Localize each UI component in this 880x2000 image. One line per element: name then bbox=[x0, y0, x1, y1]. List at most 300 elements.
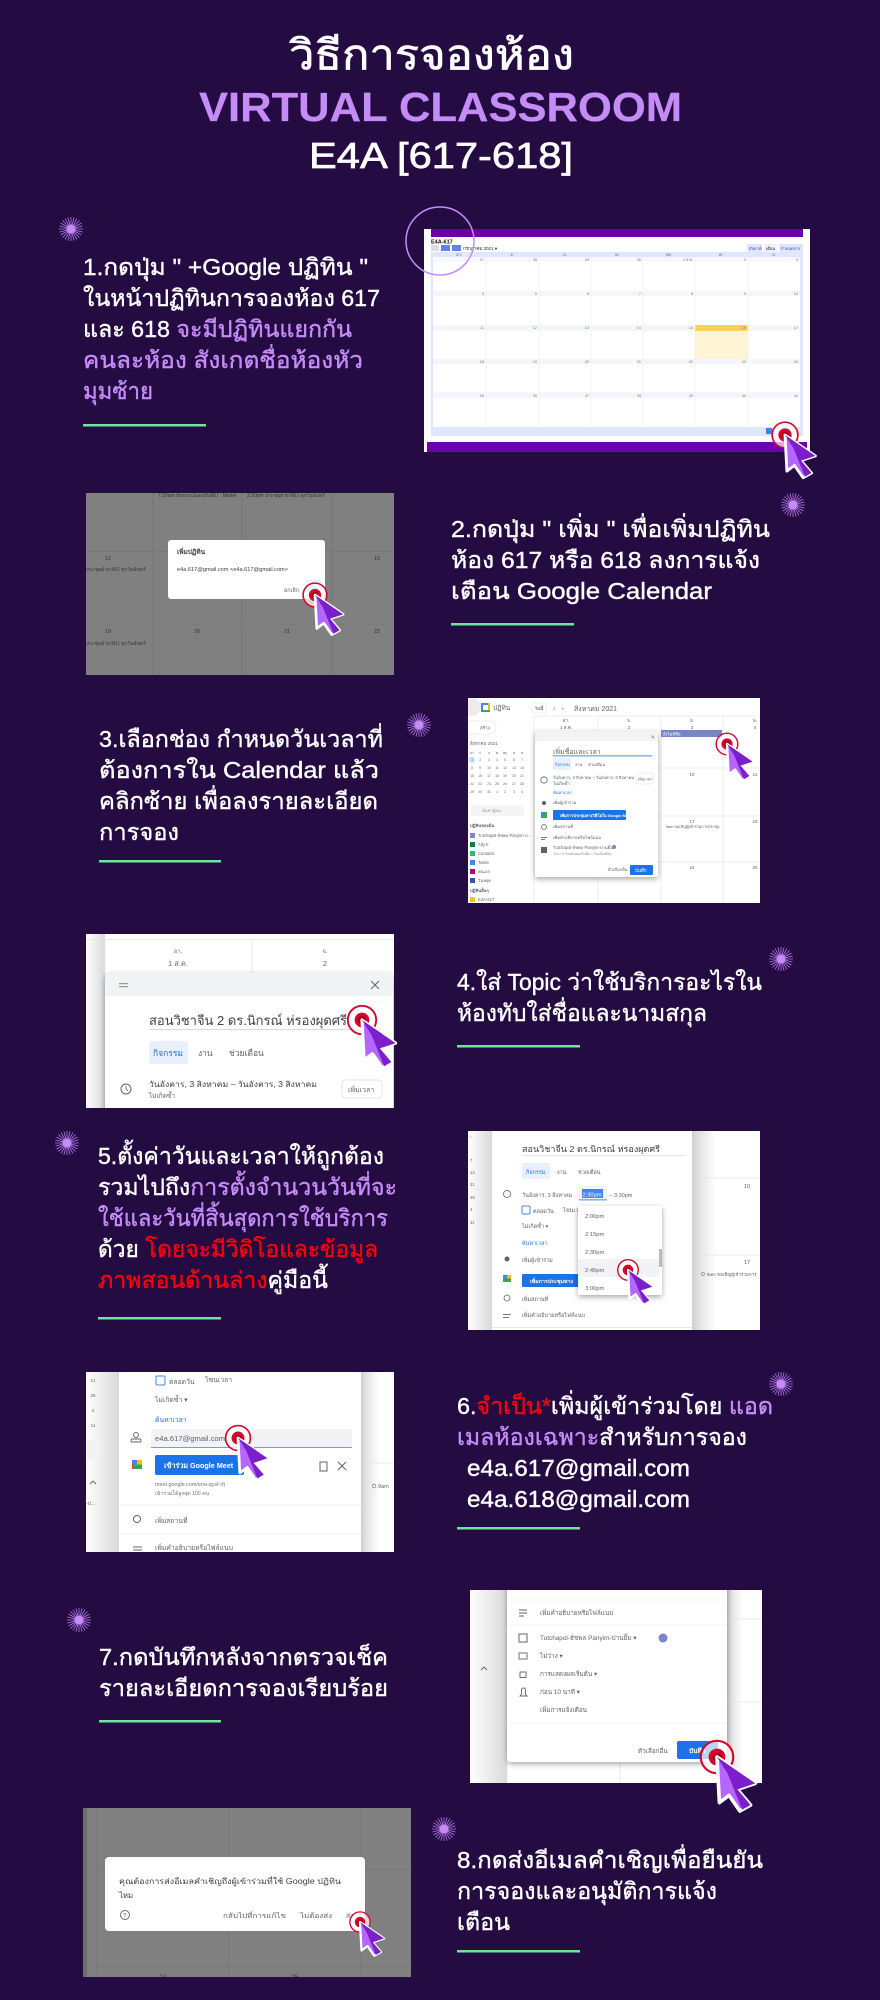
screenshot: time dropdown: 21 bbox=[470, 1182, 475, 1187]
icon: click cursor bbox=[350, 1912, 384, 1956]
screenshot: new event dialog over calendar bbox=[468, 698, 760, 903]
screenshot: new event dialog over calendar: งาน bbox=[575, 762, 582, 767]
screenshot: event title entry: งาน bbox=[198, 1048, 213, 1058]
screenshot: save event: เพิ่มคำอธิบายหรือไฟล์แนบ bbox=[540, 1608, 613, 1617]
screenshot: calendar month view: 29 bbox=[585, 258, 589, 262]
screenshot: calendar month view: 29 bbox=[689, 394, 693, 398]
icon: sparkle bbox=[769, 1372, 793, 1396]
screenshot: new event dialog over calendar: 23 bbox=[478, 782, 482, 786]
screenshot: calendar month view: 22 bbox=[689, 360, 693, 364]
screenshot: new event dialog over calendar: 24 bbox=[487, 782, 491, 786]
screenshot: new event dialog over calendar: 24 bbox=[689, 865, 695, 870]
screenshot: new event dialog over calendar: 28 bbox=[520, 782, 524, 786]
screenshot: new event dialog over calendar: 14 bbox=[520, 766, 524, 770]
screenshot: time dropdown: – bbox=[609, 1193, 613, 1199]
screenshot: new event dialog over calendar: 1 bbox=[471, 758, 473, 762]
screenshot: new event dialog over calendar: อ bbox=[488, 751, 490, 755]
screenshot: calendar month view: 3 bbox=[796, 258, 798, 262]
screenshot: new event dialog over calendar: Contacts bbox=[478, 851, 495, 856]
step 3 text: การจอง bbox=[99, 819, 179, 845]
step 8 text: การจองและอนุมัติการแจ้ง bbox=[457, 1878, 717, 1905]
screenshot: add guest field: 9am bbox=[378, 1484, 389, 1490]
screenshot: calendar month view: 21 bbox=[637, 360, 641, 364]
panel: step 6 bbox=[86, 1372, 793, 1552]
step 2 text bbox=[451, 513, 770, 604]
screenshot: new event dialog over calendar: 25 bbox=[495, 782, 499, 786]
step 1 text: คนละห้อง สังเกตชื่อห้องหัว bbox=[83, 344, 363, 373]
icon: sparkle bbox=[781, 493, 805, 517]
screenshot: calendar month view: 6 bbox=[587, 292, 589, 296]
screenshot: event title entry: ช่วยเตือน bbox=[229, 1048, 264, 1058]
step 5 text: รวมไปถึงการตั้งจำนวนวันที่จะ bbox=[98, 1171, 397, 1200]
icon: sparkle bbox=[769, 947, 793, 971]
screenshot: new event dialog over calendar: × bbox=[651, 735, 655, 741]
screenshot: new event dialog over calendar: ส bbox=[521, 751, 523, 755]
screenshot: time dropdown: 2:15pm bbox=[585, 1232, 605, 1238]
icon: click cursor bbox=[226, 1426, 267, 1479]
screenshot: new event dialog over calendar: 4 bbox=[521, 790, 523, 794]
icon: sparkle bbox=[432, 1817, 456, 1841]
screenshot: time dropdown: 4 bbox=[470, 1207, 473, 1212]
screenshot: new event dialog over calendar: Tasks bbox=[478, 860, 489, 865]
step 1 text: มุมซ้าย bbox=[83, 378, 153, 405]
panel: step 5 bbox=[55, 1131, 760, 1330]
screenshot: add guest field: ตลอดวัน bbox=[169, 1378, 195, 1386]
title: VIRTUAL CLASSROOM bbox=[199, 84, 682, 130]
screenshot: new event dialog over calendar: จ. bbox=[627, 718, 631, 723]
screenshot: time dropdown: 2:30pm bbox=[582, 1192, 602, 1198]
screenshot: add guest field: meet.google.com/ena-qysf-rfj bbox=[155, 1482, 225, 1488]
icon: sparkle bbox=[407, 713, 431, 737]
screenshot: time dropdown: 9am ขอเชิญผู้เข้าร่วมการ bbox=[707, 1272, 757, 1278]
screenshot: calendar month view: 12 bbox=[533, 326, 537, 330]
screenshot: calendar month view: E4A-617 bbox=[431, 240, 453, 246]
screenshot: calendar month view: 18 bbox=[480, 360, 484, 364]
screenshot: new event dialog over calendar: ตัวเลือกอื่น bbox=[608, 866, 628, 872]
screenshot: new event dialog over calendar: 21 bbox=[520, 774, 524, 778]
screenshot: add guest field: e4a.617@gmail.com bbox=[155, 1434, 225, 1443]
screenshot: calendar month view: พฤ. bbox=[666, 252, 672, 257]
screenshot: time dropdown: 2:30pm bbox=[585, 1250, 605, 1256]
screenshot: calendar month view: สัปดาห์ bbox=[749, 246, 762, 251]
screenshot: send invitation dialog: 25 bbox=[292, 1975, 299, 1981]
screenshot: new event dialog over calendar: ปฏิทินอื่นๆ bbox=[470, 887, 489, 894]
screenshot: add guest field: -ป... bbox=[86, 1501, 95, 1507]
screenshot: new event dialog over calendar: 9 bbox=[479, 766, 481, 770]
screenshot: add guest field bbox=[86, 1372, 394, 1552]
screenshot: calendar month view: 16 bbox=[742, 326, 746, 330]
screenshot: time dropdown: 11 bbox=[470, 1220, 475, 1225]
screenshot: time dropdown: 2:45pm bbox=[585, 1268, 605, 1274]
screenshot: new event dialog over calendar: สร้าง bbox=[480, 726, 490, 730]
screenshot: calendar month view: 27 bbox=[480, 258, 484, 262]
screenshot: new event dialog over calendar: ค้นหาผู้คน bbox=[482, 808, 501, 814]
screenshot: time dropdown: เพิ่มผู้เข้าร่วม bbox=[522, 1256, 553, 1264]
panel: step 2 bbox=[86, 492, 805, 675]
screenshot: calendar month view: 24 bbox=[794, 360, 798, 364]
screenshot: add calendar dialog: ประชุมฝ่าย MLI ทุกวันจันทร์ bbox=[86, 640, 146, 647]
icon: click cursor bbox=[618, 1260, 652, 1304]
screenshot: new event dialog over calendar: วันนี้ bbox=[534, 705, 544, 711]
screenshot: send invitation dialog: 24 bbox=[160, 1975, 167, 1981]
screenshot: add calendar dialog: ยกเลิก bbox=[284, 587, 299, 594]
screenshot: new event dialog over calendar: 18 bbox=[752, 819, 758, 824]
step 5 text: ใช้และวันที่สิ้นสุดการใช้บริการ bbox=[98, 1202, 388, 1232]
panel: step 8 bbox=[83, 1808, 763, 1981]
screenshot: new event dialog over calendar: 30 bbox=[478, 790, 482, 794]
screenshot: calendar month view: 7 bbox=[639, 292, 641, 296]
screenshot: new event dialog over calendar: 19 bbox=[503, 774, 507, 778]
screenshot: time dropdown: วันอังคาร, 3 สิงหาคม bbox=[522, 1192, 573, 1199]
screenshot: new event dialog over calendar: 8 bbox=[471, 766, 473, 770]
screenshot: new event dialog over calendar: 10 bbox=[689, 772, 695, 777]
step 6 text: 6.จำเป็น*เพิ่มผู้เข้าร่วมโดย แอด bbox=[457, 1390, 773, 1420]
screenshot: time dropdown: เพิ่มการประชุมทาง bbox=[530, 1277, 573, 1285]
screenshot: new event dialog over calendar: 1 ส.ค. bbox=[560, 725, 572, 730]
screenshot: add guest field: เข้าร่วม Google Meet bbox=[164, 1461, 234, 1470]
screenshot: time dropdown: 17 bbox=[744, 1260, 750, 1266]
screenshot: time dropdown: เพิ่มสถานที่ bbox=[522, 1295, 549, 1303]
step 8 text bbox=[457, 1844, 763, 1935]
screenshot: new event dialog over calendar: เพิ่มชื่อและเวลา bbox=[553, 747, 601, 756]
screenshot: time dropdown: ช่วยเตือน bbox=[578, 1169, 601, 1176]
screenshot: time dropdown: 10 bbox=[744, 1184, 750, 1190]
screenshot: new event dialog over calendar: 7 bbox=[521, 758, 523, 762]
screenshot: new event dialog over calendar: ไม่เกิดซ้ำ bbox=[552, 780, 570, 786]
screenshot: new event dialog over calendar: พฤ bbox=[503, 751, 507, 755]
step 5 text: ภาพสอนด้านล่างคู่มือนี้ bbox=[98, 1264, 328, 1294]
screenshot: calendar month view: 1 ส.ค. bbox=[683, 257, 693, 262]
screenshot: event title entry bbox=[86, 934, 394, 1108]
screenshot: send invitation dialog: ไหม bbox=[118, 1891, 133, 1900]
screenshot: add guest field: ไม่เกิดซ้ำ ▾ bbox=[154, 1394, 188, 1404]
screenshot: calendar month view bbox=[424, 229, 810, 452]
screenshot: add calendar dialog: เพิ่มปฏิทิน bbox=[177, 546, 206, 556]
screenshot: add calendar dialog: 21 bbox=[284, 629, 290, 635]
icon: sparkle bbox=[67, 1608, 91, 1632]
screenshot: calendar month view: 27 bbox=[585, 394, 589, 398]
screenshot: calendar month view: 9 bbox=[744, 292, 746, 296]
screenshot: calendar month view: 30 bbox=[742, 394, 746, 398]
step 2 text: ห้อง 617 หรือ 618 ลงการแจ้ง bbox=[451, 547, 760, 573]
screenshot: event title entry: ไม่เกิดซ้ำ bbox=[148, 1091, 175, 1100]
title: E4A [617-618] bbox=[309, 135, 573, 176]
screenshot: new event dialog over calendar: 12 bbox=[503, 766, 507, 770]
screenshot: save event: การแสดงผลเริ่มต้น ▾ bbox=[540, 1669, 597, 1678]
screenshot: calendar month view: 11 bbox=[480, 326, 484, 330]
screenshot: calendar month view: 15 bbox=[689, 326, 693, 330]
step 8 text: 8.กดส่งอีเมลคำเชิญเพื่อยืนยัน bbox=[457, 1844, 763, 1873]
screenshot: new event dialog over calendar: 2 bbox=[628, 725, 631, 730]
screenshot: new event dialog over calendar: ปฏิทิน bbox=[493, 704, 511, 712]
screenshot: new event dialog over calendar: ว่าง • การแสดงผลเริ่มต้น • ไม่แจ้งเตือน bbox=[553, 851, 612, 856]
screenshot: event title entry: อา. bbox=[174, 949, 183, 955]
screenshot: time dropdown: ค้นหาเวลา bbox=[522, 1240, 548, 1247]
step 1 text: 1.กดปุ่ม " +Google ปฏิทิน " bbox=[83, 254, 368, 281]
icon: click cursor bbox=[701, 1741, 755, 1811]
screenshot: new event dialog over calendar: 27 bbox=[512, 782, 516, 786]
screenshot: send invitation dialog: ไม่ต้องส่ง bbox=[299, 1912, 332, 1920]
screenshot: calendar month view: 4 bbox=[482, 292, 484, 296]
step 4 text: 4.ใส่ Topic ว่าใช้บริการอะไรใน bbox=[457, 969, 762, 995]
screenshot: send invitation dialog: ? bbox=[123, 1914, 127, 1920]
screenshot: send invitation dialog: คุณต้องการส่งอีเมลคำเชิญถึงผู้เข้าร่วมที่ใช้ Google ปฏิทิน bbox=[119, 1876, 342, 1887]
screenshot: new event dialog over calendar: เพิ่มสถานที่ bbox=[553, 823, 573, 829]
screenshot: time dropdown bbox=[468, 1131, 760, 1330]
screenshot: new event dialog over calendar: 18 bbox=[495, 774, 499, 778]
screenshot: add guest field: 4 bbox=[92, 1408, 95, 1413]
screenshot: new event dialog over calendar: พ bbox=[496, 751, 498, 755]
screenshot: calendar month view: ส. bbox=[772, 252, 776, 257]
screenshot: new event dialog over calendar: 11 bbox=[753, 772, 758, 777]
screenshot: add calendar dialog: 2:30pm ประชุมฝ่าย MLI ทุกวันจันทร์ bbox=[247, 492, 325, 499]
step 6 text: เมลห้องเฉพาะสำหรับการจอง bbox=[457, 1424, 747, 1450]
screenshot: event title entry: เพิ่มเวลา bbox=[348, 1085, 374, 1094]
step 3 text: 3.เลือกช่อง กำหนดวันเวลาที่ bbox=[99, 723, 383, 752]
screenshot: new event dialog over calendar: 9am ขอเชิญผู้เข้าร่วมการประชุม bbox=[666, 824, 720, 830]
step 7 text: รายละเอียดการจองเรียบร้อย bbox=[99, 1675, 388, 1701]
screenshot: time dropdown: โซนเวลา bbox=[563, 1206, 585, 1214]
screenshot: event title entry: 1 ส.ค. bbox=[168, 959, 188, 968]
step 5 text bbox=[98, 1140, 397, 1294]
screenshot: new event dialog over calendar: E4A-617 bbox=[478, 897, 495, 902]
title bbox=[199, 32, 682, 176]
screenshot: calendar month view: ศ. bbox=[719, 252, 723, 257]
panel: step 7 bbox=[67, 1580, 762, 1811]
screenshot: event title entry: วันอังคาร, 3 สิงหาคม – วันอังคาร, 3 สิงหาคม bbox=[149, 1080, 317, 1089]
screenshot: add calendar dialog bbox=[86, 492, 394, 675]
screenshot: add guest field: เข้าร่วมได้สูงสุด 100 คน bbox=[155, 1489, 210, 1497]
screenshot: time dropdown: 28 bbox=[470, 1195, 475, 1200]
screenshot: calendar month view: กำหนดการ bbox=[781, 246, 801, 251]
screenshot: new event dialog over calendar: 5 bbox=[504, 758, 506, 762]
screenshot: save event bbox=[470, 1590, 762, 1783]
screenshot: add calendar dialog: ประชุมฝ่าย MLI ทุกวันจันทร์ bbox=[86, 566, 146, 573]
panel: step 1 bbox=[59, 207, 815, 478]
screenshot: new event dialog over calendar: ‹ bbox=[553, 706, 555, 712]
screenshot: new event dialog over calendar: จ bbox=[479, 751, 481, 755]
screenshot: new event dialog over calendar: 15 bbox=[470, 774, 474, 778]
screenshot: new event dialog over calendar: คนเอก bbox=[478, 869, 491, 874]
screenshot: new event dialog over calendar: 17 bbox=[689, 819, 695, 824]
screenshot: new event dialog over calendar: 4 bbox=[496, 758, 498, 762]
screenshot: calendar month view: 28 bbox=[637, 394, 641, 398]
screenshot: event title entry: สอนวิชาจีน 2 ดร.นิกรณ์ ห่รองผุดศรี bbox=[149, 1013, 347, 1029]
step 7 text: 7.กดบันทึกหลังจากตรวจเช็ค bbox=[99, 1642, 388, 1670]
screenshot: time dropdown: งาน bbox=[557, 1170, 567, 1176]
screenshot: new event dialog over calendar: 17 bbox=[487, 774, 491, 778]
screenshot: time dropdown: กิจกรรม bbox=[525, 1169, 546, 1176]
screenshot: new event dialog over calendar: ยังไม่มีชื่อ bbox=[663, 730, 681, 736]
screenshot: time dropdown: เพิ่มคำอธิบายหรือไฟล์แนบ bbox=[522, 1311, 586, 1319]
step 8 text: เตือน bbox=[457, 1909, 510, 1935]
screenshot: calendar month view: จ. bbox=[510, 252, 514, 257]
screenshot: new event dialog over calendar: 29 bbox=[470, 790, 474, 794]
screenshot: new event dialog over calendar: 2 bbox=[504, 790, 506, 794]
step 6 text bbox=[457, 1390, 773, 1512]
screenshot: new event dialog over calendar: สิงหาคม 2021 bbox=[470, 741, 498, 746]
screenshot: new event dialog over calendar: › bbox=[562, 706, 564, 712]
step 4 text bbox=[457, 969, 762, 1027]
screenshot: new event dialog over calendar: 10 bbox=[487, 766, 491, 770]
screenshot: calendar month view: 5 bbox=[535, 292, 537, 296]
screenshot: save event: ตัวเลือกอื่น bbox=[638, 1746, 668, 1755]
screenshot: calendar month view: เดือน bbox=[766, 246, 775, 251]
screenshot: add guest field: ค้นหาเวลา bbox=[155, 1416, 187, 1424]
screenshot: calendar month view: 31 bbox=[794, 394, 798, 398]
step 6 text: e4a.618@gmail.com bbox=[467, 1486, 690, 1512]
step 1 text: และ 618 จะมีปฏิทินแยกกัน bbox=[83, 316, 352, 342]
screenshot: event title entry: 2 bbox=[323, 959, 327, 968]
screenshot: new event dialog over calendar: 13 bbox=[512, 766, 516, 770]
screenshot: add calendar dialog: 15 bbox=[374, 556, 380, 562]
screenshot: new event dialog over calendar: 20 bbox=[512, 774, 516, 778]
screenshot: new event dialog over calendar: กิจกรรม bbox=[555, 762, 570, 767]
screenshot: time dropdown: สอนวิชาจีน 2 ดร.นิกรณ์ ห่รองผุดศรี bbox=[522, 1144, 660, 1155]
screenshot: time dropdown: 14 bbox=[470, 1170, 475, 1175]
screenshot: new event dialog over calendar: ช่วยเตือน bbox=[588, 762, 605, 767]
screenshot: new event dialog over calendar: 3 bbox=[488, 758, 490, 762]
screenshot: new event dialog over calendar: เพิ่มเวลา bbox=[638, 776, 652, 782]
screenshot: add calendar dialog: 22 bbox=[374, 629, 380, 635]
screenshot: calendar month view: พ. bbox=[615, 252, 619, 257]
screenshot: new event dialog over calendar: ศ bbox=[513, 751, 516, 755]
step 6 text: e4a.617@gmail.com bbox=[467, 1455, 690, 1481]
step 5 text: ด้วย โดยจะมีวิดิโอและข้อมูล bbox=[98, 1236, 378, 1263]
screenshot: calendar month view: 25 bbox=[480, 394, 484, 398]
screenshot: new event dialog over calendar: 3 bbox=[513, 790, 515, 794]
screenshot: save event: ก่อน 10 นาที ▾ bbox=[540, 1688, 580, 1696]
step 3 text: คลิกซ้าย เพื่อลงรายละเอียด bbox=[99, 785, 378, 814]
icon: click cursor bbox=[772, 422, 815, 478]
step 1 text: ในหน้าปฏิทินการจองห้อง 617 bbox=[83, 285, 380, 311]
screenshot: new event dialog over calendar: Ally K bbox=[478, 842, 489, 847]
step 5 text: 5.ตั้งค่าวันและเวลาให้ถูกต้อง bbox=[98, 1140, 384, 1170]
screenshot: time dropdown: › bbox=[470, 1134, 472, 1139]
screenshot: save event: ไม่ว่าง ▾ bbox=[539, 1652, 563, 1660]
screenshot: new event dialog over calendar: 25 bbox=[752, 865, 758, 870]
screenshot: calendar month view: 14 bbox=[637, 326, 641, 330]
panel: step 3 bbox=[99, 698, 760, 903]
screenshot: calendar month view: อ. bbox=[563, 252, 567, 257]
screenshot: new event dialog over calendar: 22 bbox=[470, 782, 474, 786]
screenshot: new event dialog over calendar: อ. bbox=[690, 718, 694, 723]
step 4 text: ห้องทับใส่ชื่อและนามสกุล bbox=[457, 997, 707, 1027]
screenshot: calendar month view: 20 bbox=[585, 360, 589, 364]
screenshot: new event dialog over calendar: 31 bbox=[487, 790, 491, 794]
screenshot: new event dialog over calendar: เพิ่มคำอธิบายหรือไฟล์แนบ bbox=[553, 834, 601, 840]
screenshot: time dropdown: ตลอดวัน bbox=[533, 1208, 554, 1215]
highlight circle: calendar name bbox=[406, 207, 474, 275]
step 7 text bbox=[99, 1642, 388, 1701]
step 2 text: เตือน Google Calendar bbox=[451, 578, 712, 604]
screenshot: add calendar dialog: เพิ่ม bbox=[308, 586, 318, 594]
screenshot: add guest field: 11 bbox=[91, 1423, 96, 1428]
screenshot: calendar month view: กรกฎาคม 2021 ▾ bbox=[463, 246, 498, 251]
screenshot: time dropdown: ไม่เกิดซ้ำ ▾ bbox=[521, 1222, 549, 1230]
screenshot: time dropdown: 7 bbox=[470, 1158, 473, 1163]
screenshot: new event dialog over calendar: ค้นหาเวลา bbox=[553, 790, 572, 795]
screenshot: calendar month view: 17 bbox=[794, 326, 798, 330]
screenshot: new event dialog over calendar: เพิ่มการประชุมทางวิดีโอใน Google Meet bbox=[560, 812, 632, 819]
title: วิธีการจองห้อง bbox=[289, 32, 574, 78]
screenshot: add calendar dialog: 12 bbox=[105, 556, 111, 562]
screenshot: event title entry: จ. bbox=[322, 949, 328, 955]
step 2 text: 2.กดปุ่ม " เพิ่ม " เพื่อเพิ่มปฏิทิน bbox=[451, 513, 770, 543]
screenshot: new event dialog over calendar: 2 bbox=[479, 758, 481, 762]
screenshot: save event: เพิ่มการแจ้งเตือน bbox=[540, 1705, 588, 1714]
screenshot: new event dialog over calendar: 4 bbox=[754, 725, 757, 730]
screenshot: calendar month view: 19 bbox=[533, 360, 537, 364]
step 3 text: ต้องการใน Calendar แล้ว bbox=[99, 757, 379, 783]
icon: sparkle bbox=[59, 217, 83, 241]
screenshot: send invitation dialog: กลับไปที่การแก้ไข bbox=[223, 1911, 286, 1920]
screenshot: time dropdown: 3:30pm bbox=[614, 1193, 633, 1199]
screenshot: save event: บันทึก bbox=[689, 1747, 706, 1755]
screenshot: new event dialog over calendar: 1 bbox=[496, 790, 498, 794]
screenshot: send invitation dialog: ส่ง bbox=[346, 1913, 353, 1920]
screenshot: add guest field: เพิ่มคำอธิบายหรือไฟล์แนบ bbox=[155, 1543, 233, 1552]
screenshot: add guest field: โซนเวลา bbox=[205, 1375, 232, 1384]
icon: click cursor bbox=[303, 583, 343, 635]
screenshot: save event: Tutchapol-ธัชพล Panyim-ปานยิ้ม ▾ bbox=[540, 1633, 636, 1642]
screenshot: calendar month view: 13 bbox=[585, 326, 589, 330]
screenshot: calendar month view: 28 bbox=[533, 258, 537, 262]
screenshot: event title entry: กิจกรรม bbox=[153, 1048, 183, 1058]
screenshot: new event dialog over calendar: 16 bbox=[478, 774, 482, 778]
icon: sparkle bbox=[55, 1131, 79, 1155]
screenshot: calendar month view: 26 bbox=[533, 394, 537, 398]
screenshot: add calendar dialog: e4a.617@gmail.com <e4a.617@gmail.com> bbox=[177, 567, 289, 573]
panel: step 4 bbox=[86, 934, 793, 1113]
screenshot: add calendar dialog: 19 bbox=[105, 629, 111, 635]
screenshot: new event dialog over calendar: ปฏิทินของฉัน bbox=[470, 822, 494, 829]
screenshot: new event dialog over calendar: อา. bbox=[563, 718, 569, 723]
screenshot: new event dialog over calendar: วันอังคาร, 3 สิงหาคม – วันอังคาร, 3 สิงหาคม bbox=[553, 775, 634, 780]
screenshot: calendar month view: 8 bbox=[691, 292, 693, 296]
icon: click cursor bbox=[716, 733, 753, 780]
screenshot: new event dialog over calendar: 26 bbox=[503, 782, 507, 786]
screenshot: new event dialog over calendar: Tutchapol-ธัชพล Panyim-ป... bbox=[478, 833, 531, 838]
screenshot: new event dialog over calendar: พ. bbox=[753, 718, 757, 723]
screenshot: add calendar dialog: 20 bbox=[194, 629, 200, 635]
screenshot: new event dialog over calendar: เพิ่มผู้เข้าร่วม bbox=[553, 799, 577, 806]
screenshot: time dropdown: 3:00pm bbox=[585, 1286, 605, 1292]
screenshot: new event dialog over calendar: สิงหาคม 2021 bbox=[574, 705, 617, 713]
screenshot: add guest field: 21 bbox=[90, 1378, 96, 1383]
screenshot: new event dialog over calendar: บันทึก bbox=[635, 868, 647, 873]
screenshot: new event dialog over calendar: 6 bbox=[513, 758, 515, 762]
screenshot: calendar month view: อา. bbox=[456, 252, 462, 257]
screenshot: send invitation dialog bbox=[83, 1808, 411, 1981]
step 3 text bbox=[99, 723, 383, 845]
screenshot: calendar month view: 10 bbox=[794, 292, 798, 296]
screenshot: add calendar dialog: 7:30am ยังหาแน่นอนกับMLI : Model bbox=[158, 493, 236, 499]
icon: click cursor bbox=[348, 1006, 396, 1067]
screenshot: calendar month view: 30 bbox=[637, 258, 641, 262]
step 1 text bbox=[83, 254, 380, 405]
screenshot: new event dialog over calendar: วันหยุด bbox=[478, 878, 491, 884]
screenshot: new event dialog over calendar: อา bbox=[470, 751, 474, 755]
screenshot: calendar month view: 23 bbox=[742, 360, 746, 364]
screenshot: add guest field: เพิ่มสถานที่ bbox=[155, 1516, 188, 1525]
screenshot: calendar month view: 2 bbox=[744, 258, 746, 262]
screenshot: new event dialog over calendar: Tutchapol-ธัชพล Panyim-ปานยิ้ม bbox=[553, 844, 613, 850]
screenshot: new event dialog over calendar: 11 bbox=[495, 766, 499, 770]
screenshot: time dropdown: 2:00pm bbox=[585, 1214, 605, 1220]
screenshot: add guest field: 28 bbox=[90, 1393, 96, 1398]
screenshot: new event dialog over calendar: 3 bbox=[691, 725, 694, 730]
